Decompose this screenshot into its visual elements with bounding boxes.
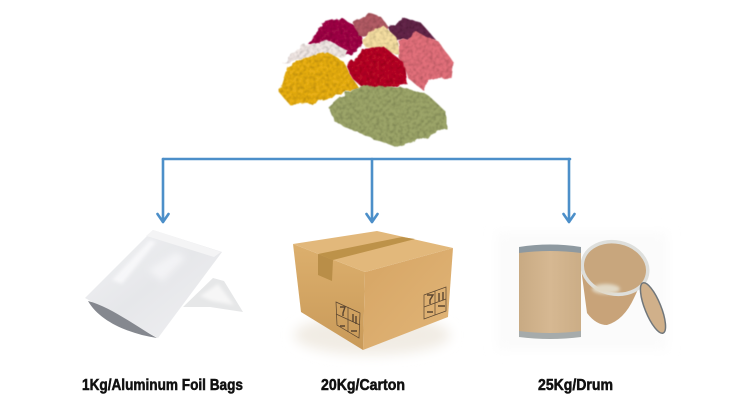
handling marks left xyxy=(336,302,360,338)
image: aluminum foil bags xyxy=(85,230,243,338)
top face xyxy=(293,231,453,272)
arrows: distribution connector xyxy=(158,159,574,222)
powder: white xyxy=(282,41,347,63)
powder: yellow xyxy=(279,51,359,105)
image: fibre drums with lid xyxy=(496,232,671,350)
powder: dark purple xyxy=(388,18,436,41)
label: drum: 25Kg/Drum xyxy=(538,377,613,394)
powder: pink xyxy=(399,33,453,91)
rear bag xyxy=(183,278,243,312)
packing tape xyxy=(318,237,415,260)
powder: crimson xyxy=(307,18,364,56)
label: foil bags: 1Kg/Aluminum Foil Bags xyxy=(82,377,243,394)
powder: red xyxy=(347,47,407,89)
closed drum xyxy=(519,244,581,339)
powder: mauve xyxy=(352,13,389,37)
floor shadow xyxy=(294,315,450,355)
image: pile of coloured powders xyxy=(279,13,453,147)
arrow: to drum xyxy=(564,159,574,222)
backdrop haze xyxy=(496,232,668,350)
powder: green xyxy=(329,85,446,147)
image: cardboard carton xyxy=(293,231,453,355)
front bag xyxy=(85,230,222,338)
drum lid xyxy=(635,280,671,336)
connector: horizontal bar xyxy=(163,158,570,160)
handling marks right xyxy=(424,287,446,319)
right face xyxy=(363,248,453,350)
label: carton: 20Kg/Carton xyxy=(321,377,405,394)
arrow: to foil bags xyxy=(158,159,168,222)
powder: cream xyxy=(362,25,400,55)
open drum xyxy=(577,236,653,325)
arrow: to carton xyxy=(366,159,378,222)
left face xyxy=(293,244,365,350)
